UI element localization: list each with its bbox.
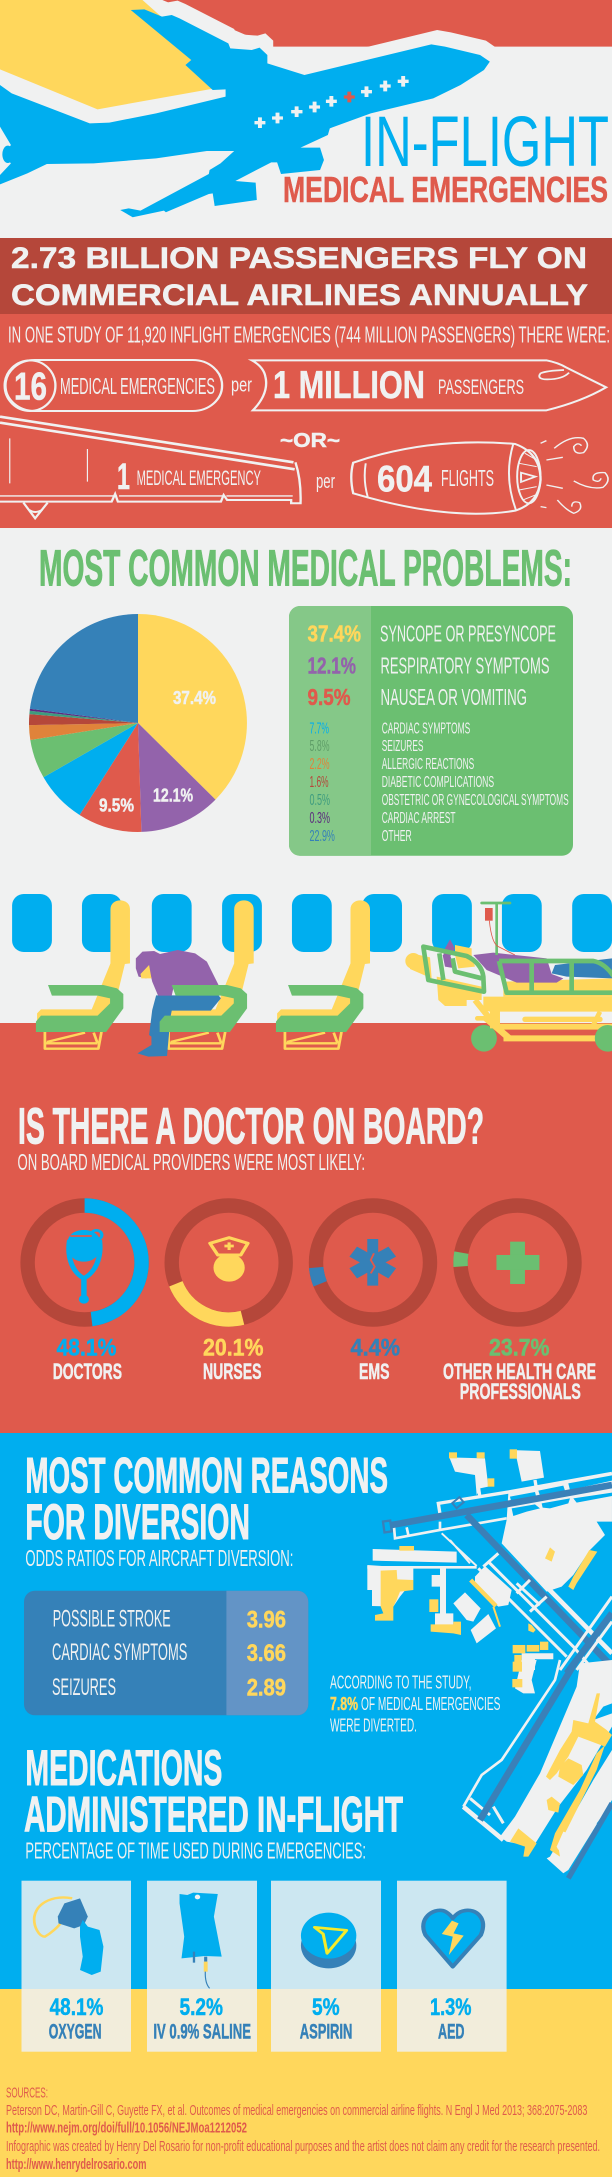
- cabin illustration: windows, seats and passenger: [12, 894, 612, 1057]
- stat row 2: 1 emergency per 604 flights: 1: [117, 456, 130, 497]
- stat row 1: 16 emergencies per 1 million passengers: 16: [14, 365, 47, 408]
- donut: doctors 48.1%: 48.1%: [57, 1335, 116, 1362]
- donut: other health care professionals 23.7%: 23.7%: [489, 1335, 550, 1362]
- donut: nurses 20.1%: 20.1%: [203, 1335, 264, 1362]
- card: aspirin: 5%: [312, 1994, 340, 2021]
- stat row 2: 1 emergency per 604 flights: per: [316, 471, 335, 493]
- panel: odds ratios table: SEIZURES: [52, 1674, 116, 1701]
- sources text block: http://www.nejm.org/doi/full/10.1056/NEJMoa1212052: [6, 2120, 247, 2137]
- stat row 2: 1 emergency per 604 flights: 604: [377, 459, 432, 500]
- icon: stretcher with patient and IV: [405, 903, 612, 1028]
- donut: EMS 4.4%: EMS: [359, 1359, 390, 1384]
- card: AED: [397, 1881, 507, 2052]
- panel: pie legend: 7.7%: [310, 720, 329, 737]
- icon: plane fuselage, wing and engine outlines: [0, 360, 608, 518]
- panel: pie legend: ALLERGIC REACTIONS: [382, 756, 474, 773]
- heading: most common reasons for diversion: ODDS RATIOS FOR AIRCRAFT DIVERSION:: [25, 1545, 293, 1571]
- callout: 7.8% diverted: [330, 1671, 500, 1736]
- title: [283, 103, 609, 210]
- donut: doctors 48.1%: [28, 1206, 142, 1384]
- callout: 7.8% diverted: ACCORDING TO THE STUDY,: [330, 1671, 472, 1692]
- panel: pie legend: 5.8%: [310, 738, 330, 755]
- banner: passengers per year: [11, 242, 588, 312]
- panel: pie legend: CARDIAC SYMPTOMS: [382, 720, 470, 737]
- panel: pie legend: [289, 606, 573, 856]
- panel: pie legend: 9.5%: [308, 684, 350, 710]
- panel: pie legend: OTHER: [382, 828, 412, 845]
- panel: odds ratios table: 2.89: [247, 1675, 286, 1702]
- airport map illustration: [367, 1449, 612, 1878]
- donut: other health care professionals 23.7%: [443, 1202, 596, 1404]
- card: oxygen: [22, 1881, 131, 2052]
- card: oxygen: 48.1%: [50, 1994, 103, 2021]
- card: IV saline: 5.2%: [180, 1994, 223, 2021]
- banner: passengers per year: 2.73 BILLION PASSENGERS FLY ON: [11, 242, 587, 275]
- stat row 1: 16 emergencies per 1 million passengers: per: [231, 375, 252, 397]
- panel: pie legend: 22.9%: [310, 828, 335, 845]
- donut: nurses 20.1%: NURSES: [203, 1359, 262, 1384]
- stat row 2: 1 emergency per 604 flights: MEDICAL EMERGENCY: [137, 467, 261, 490]
- stat row 2: 1 emergency per 604 flights: FLIGHTS: [441, 465, 494, 491]
- panel: pie legend: 2.2%: [310, 756, 330, 773]
- card: IV saline: IV 0.9% SALINE: [153, 2020, 251, 2043]
- panel: pie legend: 0.3%: [310, 810, 330, 827]
- panel: pie legend: 1.6%: [310, 774, 329, 791]
- donut: doctors 48.1%: DOCTORS: [53, 1359, 122, 1384]
- card: AED: AED: [438, 2020, 464, 2043]
- card: oxygen: OXYGEN: [49, 2020, 102, 2043]
- stat row 1: 16 emergencies per 1 million passengers: MEDICAL EMERGENCIES: [60, 373, 215, 399]
- panel: odds ratios table: CARDIAC SYMPTOMS: [52, 1639, 187, 1666]
- heading: is there a doctor on board: [18, 1097, 484, 1175]
- donut: EMS 4.4%: [299, 1188, 447, 1384]
- card: AED: 1.3%: [430, 1994, 472, 2021]
- stat row 1: 16 emergencies per 1 million passengers: 1 MILLION: [273, 364, 425, 407]
- sources text block: SOURCES:: [6, 2085, 48, 2102]
- heading: medications administered in-flight: MEDICATIONS: [25, 1740, 222, 1796]
- header illustration: airplane: [0, 0, 612, 217]
- banner: passengers per year: COMMERCIAL AIRLINES ANNUALLY: [11, 279, 588, 312]
- panel: pie legend: 0.5%: [310, 792, 330, 809]
- panel: pie legend: 12.1%: [308, 652, 356, 678]
- heading: most common reasons for diversion: FOR DIVERSION: [25, 1494, 250, 1550]
- or divider: ~OR~: [280, 430, 340, 452]
- heading: is there a doctor on board: ON BOARD MEDICAL PROVIDERS WERE MOST LIKELY:: [18, 1149, 365, 1175]
- pie chart: 9.5%: [99, 795, 134, 816]
- sources text block: [6, 2085, 600, 2173]
- card: aspirin: ASPIRIN: [300, 2020, 352, 2043]
- panel: odds ratios table: POSSIBLE STROKE: [53, 1606, 171, 1633]
- donut: EMS 4.4%: 4.4%: [350, 1335, 400, 1362]
- pie chart: 12.1%: [153, 785, 193, 806]
- donut: nurses 20.1%: [160, 1193, 298, 1384]
- panel: pie legend: DIABETIC COMPLICATIONS: [382, 774, 494, 791]
- card: IV saline: [147, 1881, 257, 2052]
- callout: 7.8% diverted: WERE DIVERTED.: [330, 1715, 417, 1736]
- stat row 1: 16 emergencies per 1 million passengers: [14, 364, 524, 408]
- stat row 2: 1 emergency per 604 flights: [117, 456, 494, 500]
- sources text block: http://www.henrydelrosario.com: [6, 2156, 146, 2173]
- panel: pie legend: CARDIAC ARREST: [382, 810, 456, 827]
- panel: odds ratios table: 3.96: [247, 1606, 286, 1633]
- pie chart: 37.4%: [173, 687, 216, 708]
- panel: odds ratios table: 3.66: [247, 1640, 286, 1667]
- callout: 7.8% diverted: 7.8%: [330, 1693, 358, 1714]
- card: aspirin: [271, 1881, 381, 2052]
- panel: odds ratios table: [24, 1591, 308, 1715]
- callout: 7.8% diverted: OF MEDICAL EMERGENCIES: [361, 1693, 500, 1714]
- heading: most common reasons for diversion: [25, 1448, 388, 1571]
- pie chart: [29, 614, 247, 832]
- heading: medications administered in-flight: [24, 1740, 403, 1863]
- panel: pie legend: 37.4%: [308, 621, 361, 647]
- panel: pie legend: SEIZURES: [382, 738, 424, 755]
- stat row 1: 16 emergencies per 1 million passengers: PASSENGERS: [438, 376, 524, 399]
